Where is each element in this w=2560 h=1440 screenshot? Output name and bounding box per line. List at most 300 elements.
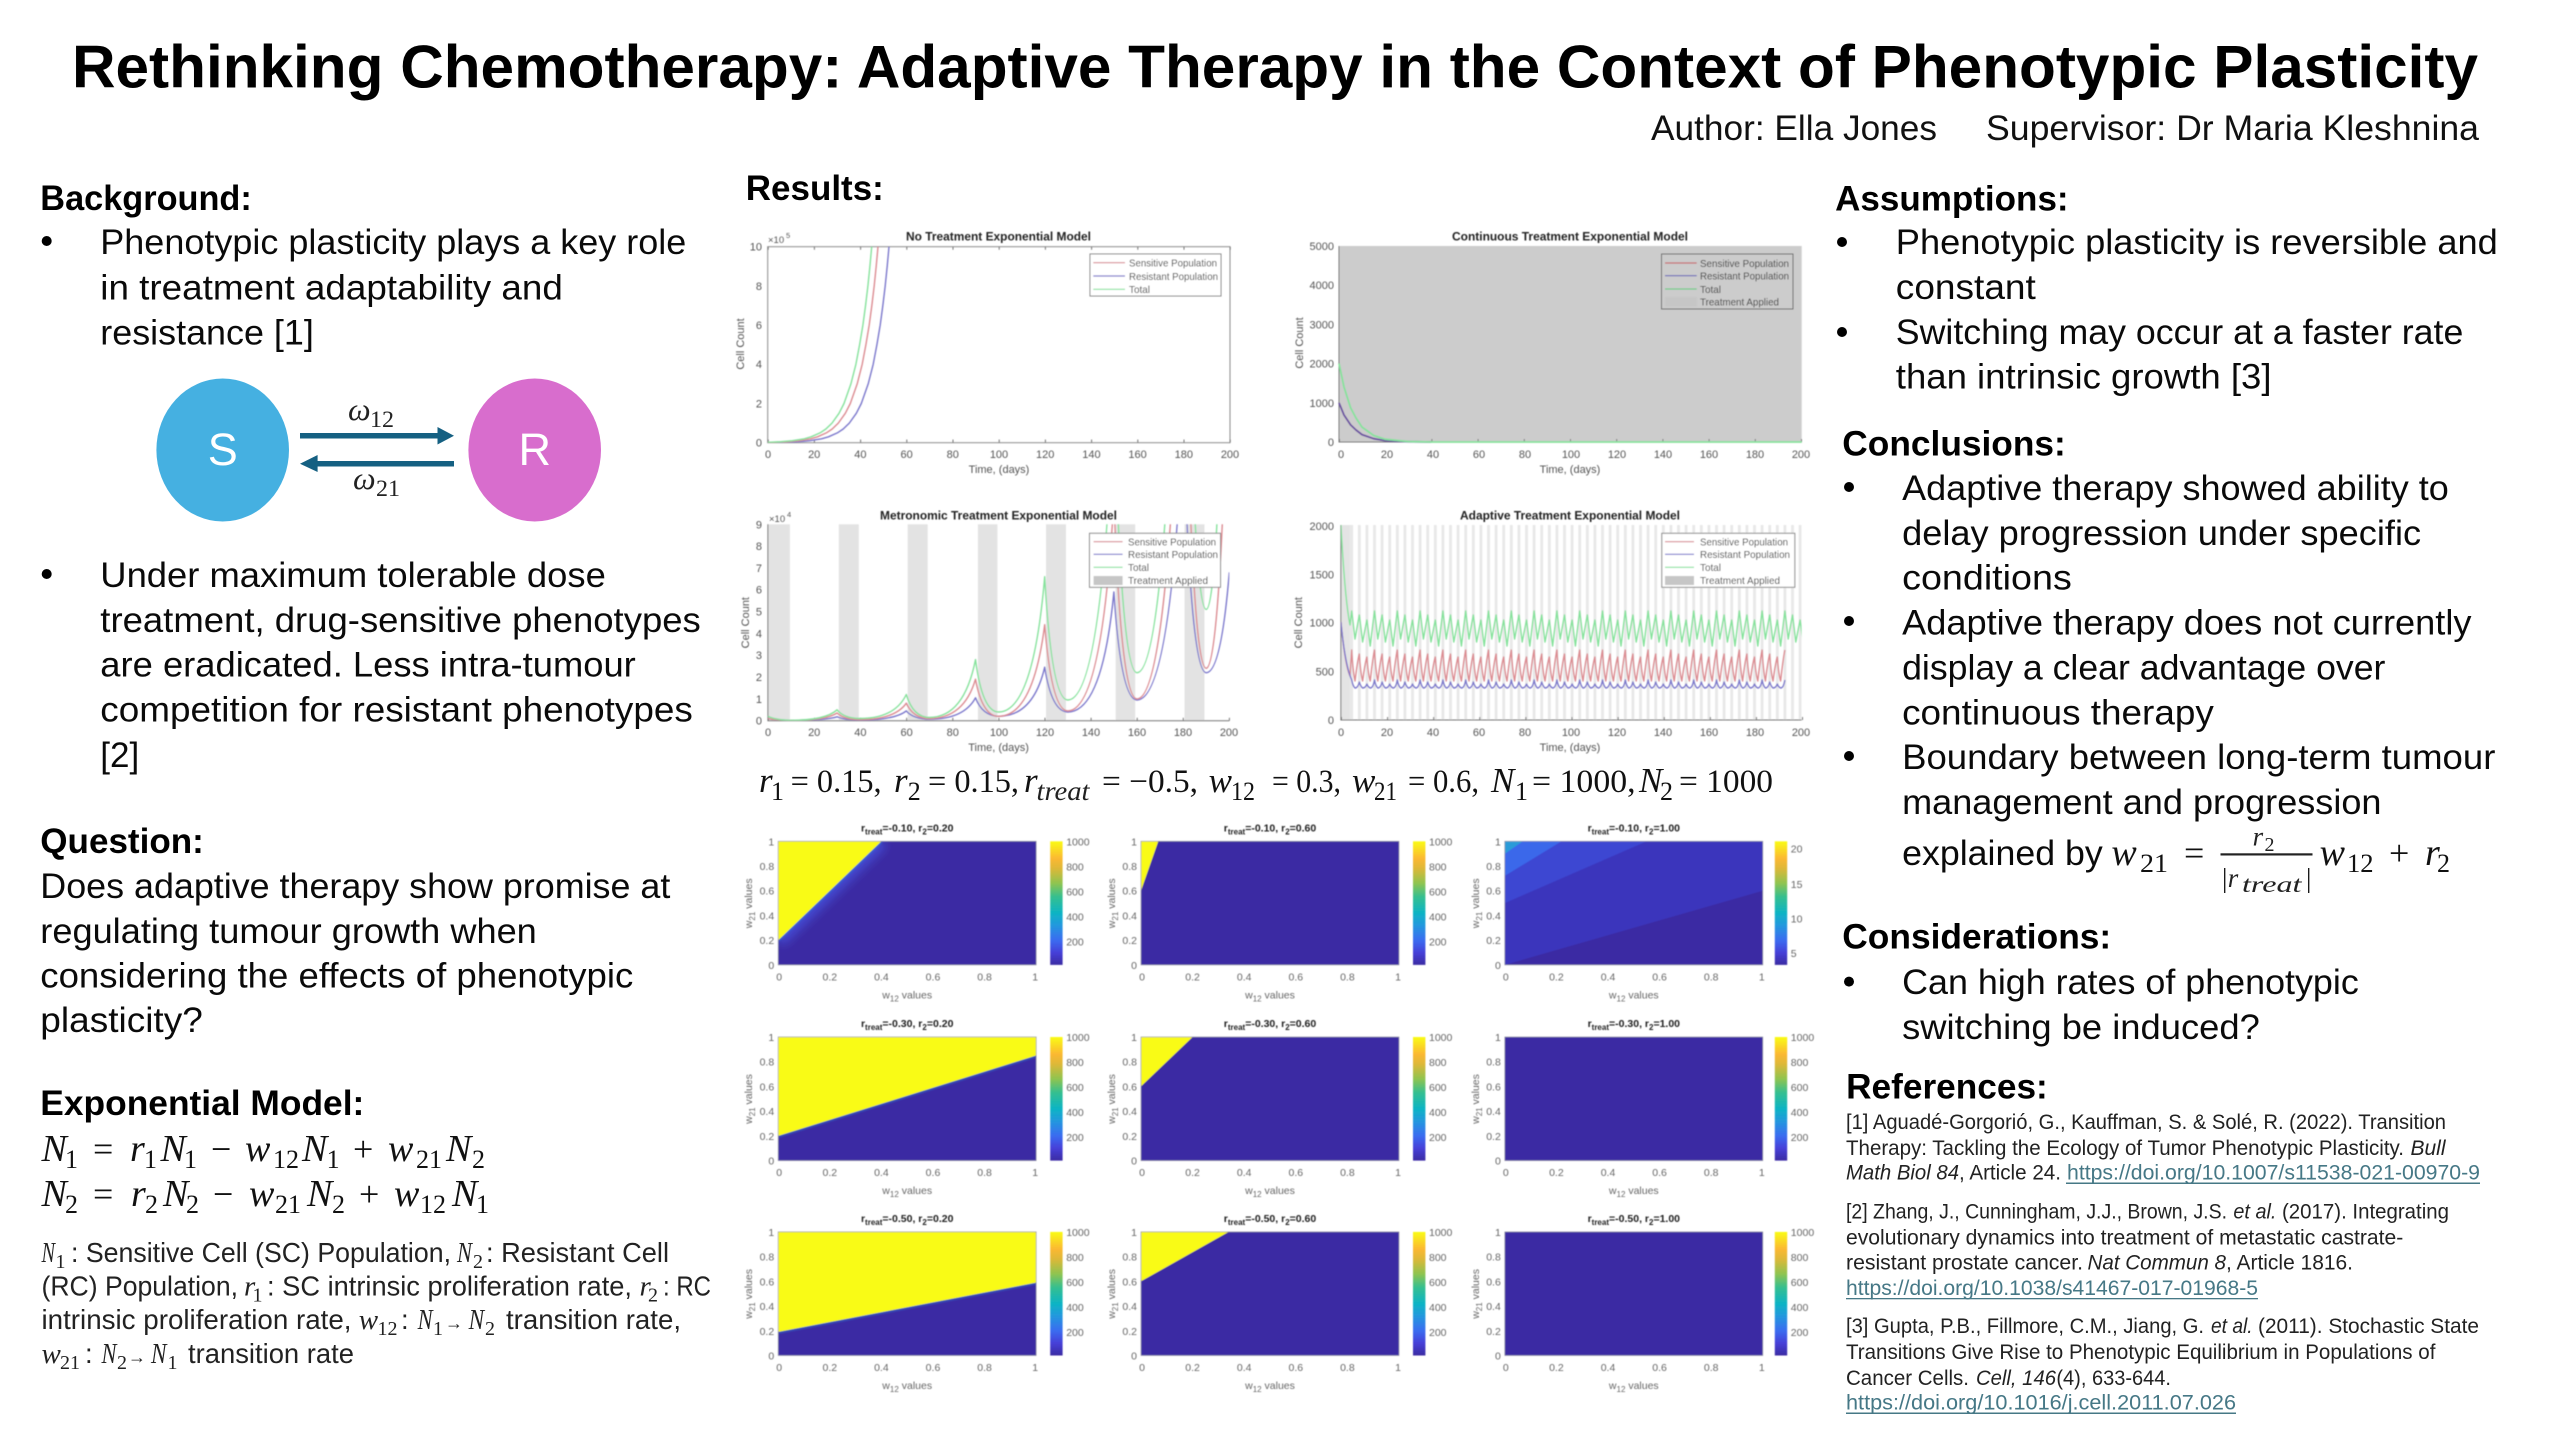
reference 2: Nat Commun 8 (2088, 1252, 2226, 1274)
chart: continuous treatment: 180 (1746, 449, 1764, 461)
heatmap: rtreat -0.10, r2 1.00: 0.2 (1549, 971, 1564, 983)
heatmap: rtreat -0.30, r2 0.20: 0 (768, 1156, 774, 1168)
parameter values: = −0.5, (1102, 764, 1198, 800)
assumptions list: Phenotypic plasticity is reversible and (1896, 223, 2498, 262)
legend (1662, 533, 1795, 587)
heatmap: rtreat -0.30, r2 1.00: 400 (1791, 1107, 1808, 1119)
equation: boundary: w (2320, 832, 2346, 874)
chart: metronomic treatment: 160 (1128, 727, 1146, 739)
heatmap: rtreat -0.30, r2 1.00: 0.4 (1486, 1106, 1501, 1118)
heatmap: rtreat -0.30, r2 1.00: 12 (1617, 1190, 1626, 1199)
heatmap: rtreat -0.50, r2 1.00: 400 (1791, 1302, 1808, 1314)
heading: considerations: Considerations: (1842, 918, 2111, 957)
heatmap: rtreat -0.30, r2 0.60: 600 (1429, 1082, 1447, 1094)
equation: N1: 1 (184, 1145, 197, 1174)
icon: resistant cell R: R (518, 424, 551, 475)
heatmap: rtreat -0.10, r2 0.60: 0.6 (1122, 886, 1137, 898)
equation: N1: N (40, 1128, 70, 1170)
conclusions list: Boundary between long-term tumour (1902, 738, 2496, 777)
reference 3: https://doi.org/10.1016/j.cell.2011.07.026 (1846, 1392, 2236, 1415)
reference 2 (1846, 1200, 2449, 1300)
chart: adaptive treatment: 180 (1746, 727, 1764, 739)
parameter values: = 0.15, (791, 764, 882, 800)
equation: boundary: r (2425, 832, 2440, 874)
equation: boundary (2111, 822, 2450, 897)
heatmap: rtreat -0.50, r2 0.60: 0.6 (1122, 1276, 1137, 1288)
chart: adaptive treatment: Time, (days) (1540, 742, 1600, 754)
equation: N2: − (213, 1174, 233, 1214)
heatmap: rtreat -0.10, r2 0.20: 400 (1066, 911, 1084, 923)
heatmap: rtreat -0.10, r2 0.20: 0.4 (760, 910, 774, 922)
heatmap: rtreat -0.10, r2 1.00: values (1470, 878, 1482, 912)
heading: exponential model: Exponential Model: (40, 1084, 364, 1123)
legend: Total (1129, 284, 1150, 296)
legend (1090, 254, 1221, 296)
legend: Total (1700, 562, 1721, 574)
heatmap: rtreat -0.10, r2 0.20: =-0.10, r (882, 822, 922, 834)
authors (1651, 109, 2480, 148)
heatmap: rtreat -0.30, r2 0.20: 600 (1066, 1082, 1084, 1094)
heatmap: rtreat -0.10, r2 0.60: 0 (1139, 971, 1145, 983)
authors: Author: Ella Jones (1651, 109, 1937, 148)
equation: N2: 12 (420, 1190, 446, 1219)
chart: continuous treatment: 60 (1473, 449, 1485, 461)
heatmap: rtreat -0.30, r2 0.20: 1000 (1066, 1032, 1090, 1044)
chart: metronomic treatment: 140 (1082, 727, 1100, 739)
legend: Sensitive Population (1128, 536, 1216, 548)
reference 1 (1846, 1111, 2480, 1185)
chart: no treatment: 140 (1082, 449, 1101, 461)
equation: N2: 2 (145, 1190, 158, 1219)
parameter values: 21 (1374, 777, 1397, 806)
heatmap: rtreat -0.30, r2 1.00: 800 (1791, 1057, 1808, 1069)
heatmap: rtreat -0.30, r2 0.60: =-0.30, r (1245, 1018, 1285, 1030)
icon: sensitive cell S: S (208, 424, 238, 475)
chart: continuous treatment: 0 (1328, 437, 1334, 449)
heatmap: rtreat -0.50, r2 1.00: values (1470, 1269, 1482, 1302)
heading: conclusions: Conclusions: (1842, 424, 2066, 463)
heatmap: rtreat -0.50, r2 0.20: values (743, 1269, 755, 1302)
heatmap: rtreat -0.10, r2 0.20: w (882, 989, 890, 1001)
chart: metronomic treatment: 2 (756, 672, 762, 684)
heatmap: rtreat -0.50, r2 1.00: 0.2 (1486, 1326, 1501, 1338)
heatmap: rtreat -0.30, r2 0.20: 2 (922, 1023, 927, 1032)
heatmap: rtreat -0.30, r2 0.60: 0.2 (1185, 1167, 1200, 1179)
chart: metronomic treatment: 20 (808, 727, 820, 739)
heatmap: rtreat -0.10, r2 0.60: 400 (1429, 911, 1447, 923)
heatmap: rtreat -0.30, r2 0.20: 0.8 (760, 1057, 774, 1069)
heatmap: rtreat -0.50, r2 0.60: 0 (1139, 1362, 1145, 1374)
heatmap: rtreat -0.50, r2 0.60 (1106, 1213, 1453, 1394)
heatmap: rtreat -0.10, r2 1.00: 20 (1791, 844, 1803, 856)
heatmap: rtreat -0.50, r2 0.20: 0.6 (760, 1276, 774, 1288)
arrow: S to R: ω (348, 391, 371, 427)
heatmap: rtreat -0.10, r2 1.00: r (1588, 822, 1592, 834)
reference 2: evolutionary dynamics into treatment of metastatic castrate- (1846, 1226, 2403, 1249)
heatmap: rtreat -0.30, r2 0.60: 0 (1139, 1167, 1145, 1179)
heatmap: rtreat -0.30, r2 0.20: 0.6 (760, 1081, 774, 1093)
heatmap: rtreat -0.30, r2 1.00: 1 (1759, 1167, 1765, 1179)
heatmap: rtreat -0.30, r2 0.60: 21 (1111, 1107, 1120, 1116)
heading: background: Background: (40, 179, 252, 218)
heatmap: rtreat -0.50, r2 0.20: w (743, 1311, 755, 1319)
heatmap: rtreat -0.10, r2 1.00: 0.4 (1486, 910, 1501, 922)
heatmap: rtreat -0.30, r2 1.00: w (1470, 1116, 1482, 1124)
heatmap: rtreat -0.30, r2 0.20: =-0.30, r (882, 1018, 922, 1030)
chart: metronomic treatment: Time, (days) (968, 742, 1029, 754)
chart: metronomic treatment: Metronomic Treatment Exponential Model (880, 510, 1117, 522)
chart: metronomic treatment: 4 (756, 628, 762, 640)
heatmap: rtreat -0.10, r2 1.00: w (1470, 921, 1482, 928)
equation: N1: w (245, 1128, 271, 1170)
heatmap: rtreat -0.30, r2 0.60: 1000 (1429, 1032, 1453, 1044)
legend: Treatment Applied (1128, 575, 1208, 587)
reference 2: , Article 1816. (2226, 1252, 2353, 1274)
heatmap: rtreat -0.10, r2 0.60: 0.4 (1122, 910, 1137, 922)
heatmap: rtreat -0.30, r2 0.60: 0 (1131, 1156, 1137, 1168)
chart: no treatment: 0 (765, 449, 771, 461)
chart: continuous treatment: 200 (1792, 449, 1810, 461)
chart: no treatment: Time, (days) (969, 464, 1029, 476)
heatmap: rtreat -0.50, r2 0.60: 0.8 (1340, 1362, 1355, 1374)
heatmap: rtreat -0.50, r2 0.60: r (1224, 1213, 1228, 1225)
parameter values (759, 761, 1773, 806)
heatmap: rtreat -0.50, r2 1.00: 0.2 (1549, 1362, 1564, 1374)
variable definitions: w (42, 1338, 62, 1370)
legend (1662, 254, 1793, 309)
heatmap: rtreat -0.30, r2 0.20: 1 (1032, 1167, 1038, 1179)
reference 3 (1846, 1315, 2479, 1415)
parameter values: = 0.15, (928, 764, 1019, 800)
heatmap: rtreat -0.10, r2 0.20: 600 (1066, 886, 1084, 898)
heatmap: rtreat -0.50, r2 0.60: 0 (1131, 1351, 1137, 1363)
legend: Sensitive Population (1129, 258, 1217, 270)
bullet text: phenotypic plasticity: resistance [1] (100, 313, 314, 352)
heatmap: rtreat -0.30, r2 0.60: 0.6 (1288, 1167, 1303, 1179)
chart: continuous treatment: 40 (1427, 449, 1439, 461)
parameter values: 2 (908, 777, 921, 806)
heatmap: rtreat -0.30, r2 0.20: 0.2 (760, 1131, 774, 1143)
reference 3: (2011). Stochastic State (2258, 1315, 2479, 1338)
variable definitions: 12 (378, 1318, 398, 1340)
heatmap: rtreat -0.50, r2 1.00: values (1625, 1380, 1659, 1392)
equation: boundary: r (2228, 863, 2239, 893)
chart: continuous treatment: 2000 (1310, 359, 1334, 371)
heatmap: rtreat -0.50, r2 0.20: w (882, 1380, 890, 1392)
heatmap: rtreat -0.10, r2 0.60: 800 (1429, 861, 1447, 873)
equation: N2: w (394, 1173, 420, 1215)
heatmap: rtreat -0.10, r2 1.00: 0.2 (1486, 935, 1501, 947)
heatmap: rtreat -0.50, r2 0.60: w (1106, 1311, 1118, 1319)
chart: continuous treatment: 20 (1381, 449, 1393, 461)
heatmap: rtreat -0.10, r2 0.60: 0.8 (1122, 861, 1137, 873)
chart: adaptive treatment: Cell Count (1293, 597, 1305, 648)
chart: adaptive treatment: 500 (1316, 667, 1334, 679)
chart: adaptive treatment: 120 (1608, 727, 1626, 739)
variable definitions: w (359, 1304, 379, 1336)
heatmap: rtreat -0.10, r2 0.60: 0.2 (1122, 935, 1137, 947)
title: Rethinking Chemotherapy: Adaptive Therapy in the Context of Phenotypic Plasticity (72, 34, 2479, 100)
arrow: R to S (300, 455, 454, 501)
equation: boundary: 12 (2347, 849, 2374, 878)
heatmap: rtreat -0.50, r2 1.00: 0.4 (1486, 1301, 1501, 1313)
equation: N2: 1 (476, 1190, 489, 1219)
heatmap: rtreat -0.50, r2 0.60: 600 (1429, 1277, 1447, 1289)
reference 2: (2017). Integrating (2282, 1200, 2449, 1224)
equation: N1: − (211, 1129, 231, 1169)
chart: metronomic treatment: 9 (756, 519, 762, 531)
considerations list: Can high rates of phenotypic (1902, 963, 2359, 1002)
variable definitions (41, 1237, 711, 1374)
variable definitions: 1 (433, 1318, 443, 1340)
heatmap: rtreat -0.50, r2 1.00: 200 (1791, 1327, 1808, 1339)
heatmap: rtreat -0.50, r2 0.60: 0.8 (1122, 1252, 1137, 1264)
chart: metronomic treatment: ×10 (769, 514, 785, 525)
equation: N1: 1 (327, 1145, 340, 1174)
heatmap: rtreat -0.50, r2 0.60: =0.60 (1290, 1213, 1316, 1225)
parameter values: 12 (1231, 777, 1255, 806)
heatmap: rtreat -0.10, r2 0.20: 0 (776, 971, 782, 983)
heatmap: rtreat -0.30, r2 0.60: 200 (1429, 1132, 1447, 1144)
chart: adaptive treatment: 0 (1328, 715, 1334, 727)
equation: N1: r (130, 1128, 145, 1170)
heatmap: rtreat -0.10, r2 0.20: 1 (1032, 971, 1038, 983)
conclusions list: management and progression (1902, 783, 2382, 822)
heatmap: rtreat -0.10, r2 1.00: 0.8 (1486, 861, 1501, 873)
variable definitions: (RC) Population, (42, 1270, 238, 1302)
bullet text: maximum tolerable dose: treatment, drug-sensitive phenotypes (100, 601, 701, 640)
variable definitions: N (101, 1338, 118, 1370)
equation: N2: r (131, 1173, 146, 1215)
heatmap: rtreat -0.50, r2 1.00: 2 (1649, 1218, 1654, 1227)
heading: question: Question: (40, 822, 204, 861)
considerations list (1844, 963, 2359, 1047)
heatmap: rtreat -0.10, r2 0.60: 1 (1395, 971, 1401, 983)
heatmap: rtreat -0.50, r2 1.00: =1.00 (1653, 1213, 1680, 1225)
heatmap: rtreat -0.10, r2 0.20: 0 (768, 960, 774, 972)
conclusions list: continuous therapy (1902, 693, 2214, 732)
chart: continuous treatment: 4000 (1310, 280, 1334, 292)
equation: N2: N (162, 1173, 191, 1215)
heatmap: rtreat -0.30, r2 1.00: 0 (1495, 1156, 1501, 1168)
heatmap: rtreat -0.10, r2 0.60: 0.4 (1237, 971, 1252, 983)
heatmap: rtreat -0.50, r2 0.20: 400 (1066, 1302, 1084, 1314)
equation: N2: 2 (65, 1190, 78, 1219)
chart: continuous treatment: 5000 (1310, 241, 1334, 253)
heatmap: rtreat -0.10, r2 0.60: treat (1228, 827, 1246, 836)
equation: N2 (40, 1173, 489, 1219)
chart: adaptive treatment: 200 (1792, 727, 1810, 739)
chart: metronomic treatment: 1 (756, 694, 762, 706)
heatmap: rtreat -0.30, r2 0.20: values (743, 1074, 755, 1107)
heatmap: rtreat -0.10, r2 0.20: w (743, 921, 755, 928)
chart: no treatment: Cell Count (735, 318, 747, 370)
variable definitions: transition rate, (506, 1304, 681, 1335)
bullet text: phenotypic plasticity (42, 223, 686, 352)
variable definitions: N (41, 1237, 56, 1269)
heatmap: rtreat -0.10, r2 0.20: values (743, 878, 755, 912)
reference 2: et al. (2233, 1200, 2276, 1224)
heatmap: rtreat -0.10, r2 1.00: 10 (1791, 913, 1803, 925)
bullet text: phenotypic plasticity: in treatment adaptability and (100, 268, 563, 307)
heatmap: rtreat -0.30, r2 0.20: 800 (1066, 1057, 1084, 1069)
heatmap: rtreat -0.50, r2 0.20: 0.4 (874, 1362, 889, 1374)
variable definitions: r (244, 1270, 256, 1302)
equation: N1 (40, 1128, 485, 1174)
parameter values: = 0.3, (1272, 764, 1341, 800)
chart: no treatment: 0 (756, 438, 762, 450)
heatmap: rtreat -0.10, r2 0.20: treat (865, 827, 883, 836)
heatmap: rtreat -0.50, r2 0.60: 0.6 (1288, 1362, 1303, 1374)
heatmap: rtreat -0.10, r2 0.60: =-0.10, r (1245, 822, 1285, 834)
heatmap: rtreat -0.30, r2 1.00: 200 (1791, 1132, 1808, 1144)
conclusions list: display a clear advantage over (1902, 648, 2386, 687)
parameter values: w (1352, 761, 1376, 800)
panel: background (40, 179, 701, 775)
parameter values: r (759, 761, 773, 800)
heatmap: rtreat -0.50, r2 0.60: 400 (1429, 1302, 1447, 1314)
heatmap: rtreat -0.50, r2 0.20: 0.8 (760, 1252, 774, 1264)
heatmap: rtreat -0.50, r2 0.20: 1 (1032, 1362, 1038, 1374)
heatmap: rtreat -0.10, r2 0.20: 2 (922, 827, 927, 836)
chart: continuous treatment: 80 (1519, 449, 1531, 461)
heatmap: rtreat -0.30, r2 1.00: 21 (1475, 1107, 1484, 1116)
heatmap: rtreat -0.50, r2 0.60: 0.4 (1122, 1301, 1137, 1313)
variable definitions: : Resistant Cell (486, 1237, 669, 1268)
heatmap: rtreat -0.30, r2 1.00: values (1625, 1185, 1659, 1197)
chart: continuous treatment: 3000 (1310, 319, 1334, 331)
chart: no treatment: 4 (756, 359, 762, 371)
heatmap: rtreat -0.50, r2 1.00: 800 (1791, 1252, 1808, 1264)
heatmap: rtreat -0.50, r2 1.00: 0.6 (1486, 1276, 1501, 1288)
heatmap: rtreat -0.30, r2 0.20: 0.2 (822, 1167, 837, 1179)
heatmap: rtreat -0.10, r2 0.20: r (861, 822, 865, 834)
heatmap: rtreat -0.30, r2 0.60: 800 (1429, 1057, 1447, 1069)
heatmap: rtreat -0.50, r2 0.60: 0.4 (1237, 1362, 1252, 1374)
heatmap: rtreat -0.10, r2 1.00: 1 (1495, 836, 1501, 848)
panel: conclusions (1842, 424, 2496, 897)
heatmap: rtreat -0.50, r2 1.00: 0 (1503, 1362, 1509, 1374)
heatmap: rtreat -0.50, r2 1.00: w (1609, 1380, 1617, 1392)
parameter values: r (1024, 761, 1038, 800)
equation: N1: = (93, 1129, 113, 1169)
heatmap: rtreat -0.30, r2 1.00: 0.8 (1486, 1057, 1501, 1069)
chart: no treatment: 5 (786, 231, 790, 240)
heatmap: rtreat -0.30, r2 0.20: treat (865, 1023, 883, 1032)
heatmap: rtreat -0.30, r2 0.20: w (743, 1116, 755, 1124)
heatmap: rtreat -0.30, r2 1.00: 1000 (1791, 1032, 1814, 1044)
heatmap: rtreat -0.50, r2 1.00: 0.8 (1704, 1362, 1719, 1374)
heatmap: rtreat -0.10, r2 1.00: 12 (1617, 994, 1626, 1003)
heatmap: rtreat -0.50, r2 1.00: r (1588, 1213, 1592, 1225)
heatmap: rtreat -0.50, r2 0.20: 21 (748, 1302, 757, 1311)
heatmap: rtreat -0.10, r2 0.60 (1106, 822, 1453, 1003)
chart: metronomic treatment: 40 (854, 727, 867, 739)
heatmap: rtreat -0.10, r2 0.60: w (1245, 989, 1253, 1001)
heatmap: rtreat -0.30, r2 0.60: 0.8 (1122, 1057, 1137, 1069)
heatmap: rtreat -0.50, r2 1.00: 600 (1791, 1277, 1808, 1289)
heatmap: rtreat -0.30, r2 0.60: w (1245, 1185, 1253, 1197)
variable definitions: : (85, 1338, 93, 1369)
chart: no treatment (735, 231, 1239, 476)
panel: references (1846, 1067, 2480, 1415)
chart: metronomic treatment: 6 (756, 585, 762, 597)
heatmap: rtreat -0.10, r2 1.00: w (1609, 989, 1617, 1001)
legend: Total (1128, 562, 1149, 574)
heatmap: rtreat -0.30, r2 0.20: 12 (890, 1190, 899, 1199)
heatmap: rtreat -0.30, r2 0.20: 200 (1066, 1132, 1084, 1144)
heatmap: rtreat -0.30, r2 0.60: 1 (1131, 1032, 1137, 1044)
equation: boundary: | (2222, 863, 2227, 893)
heatmap: rtreat -0.30, r2 0.20: values (899, 1185, 932, 1197)
legend: Total (1700, 284, 1721, 296)
reference 1: , Article 24. (1959, 1162, 2061, 1185)
heatmap: rtreat -0.10, r2 0.60: =0.60 (1290, 822, 1316, 834)
equation: N1: N (445, 1128, 474, 1170)
conclusions list: explained by (1902, 834, 2103, 873)
chart: no treatment: 100 (990, 449, 1008, 461)
equation: N2: N (40, 1173, 70, 1215)
legend: Sensitive Population (1700, 536, 1788, 548)
heatmap: rtreat -0.30, r2 1.00: =1.00 (1653, 1018, 1680, 1030)
heatmap: rtreat -0.50, r2 1.00 (1470, 1213, 1814, 1394)
chart: metronomic treatment: 60 (900, 727, 913, 739)
heatmap: rtreat -0.10, r2 0.60: 0.6 (1288, 971, 1303, 983)
heatmap: rtreat -0.10, r2 0.20: 1 (768, 836, 774, 848)
heatmap: rtreat -0.50, r2 0.20: 0.4 (760, 1301, 774, 1313)
heatmap: rtreat -0.30, r2 0.20: 0.4 (760, 1106, 774, 1118)
reference 1: Therapy: Tackling the Ecology of Tumor Phenotypic Plasticity. (1846, 1137, 2404, 1160)
bullet text: maximum tolerable dose: competition for resistant phenotypes (100, 690, 693, 730)
chart: adaptive treatment: 160 (1700, 727, 1718, 739)
reference 1: Bull (2410, 1137, 2447, 1160)
assumptions list: Switching may occur at a faster rate (1896, 313, 2463, 352)
heatmap: rtreat -0.30, r2 0.20: 1 (768, 1032, 774, 1044)
heatmap: rtreat -0.10, r2 1.00: 1 (1759, 971, 1765, 983)
heatmap: rtreat -0.30, r2 0.60: 2 (1285, 1023, 1290, 1032)
heatmap: rtreat -0.50, r2 0.60: 1 (1131, 1227, 1137, 1239)
heatmap: rtreat -0.30, r2 0.20: r (861, 1018, 865, 1030)
heatmap: rtreat -0.30, r2 0.60: =0.60 (1290, 1018, 1316, 1030)
heatmap: rtreat -0.50, r2 1.00: 21 (1475, 1302, 1484, 1311)
heading: results: Results: (746, 169, 884, 208)
equation: boundary: r (2253, 822, 2264, 852)
heatmap: rtreat -0.10, r2 0.20: 0.6 (926, 971, 940, 983)
variable definitions: → (445, 1313, 463, 1333)
reference 1: https://doi.org/10.1007/s11538-021-00970-9 (2067, 1162, 2480, 1185)
chart: metronomic treatment: 7 (756, 563, 762, 575)
arrow: S to R (300, 391, 454, 444)
chart: no treatment: 120 (1036, 449, 1054, 461)
heatmap: rtreat -0.50, r2 1.00: 1 (1759, 1362, 1765, 1374)
equation: N1: N (160, 1128, 188, 1170)
chart: metronomic treatment: 0 (756, 716, 762, 728)
heatmap: rtreat -0.10, r2 1.00: values (1625, 989, 1659, 1001)
chart: no treatment: 40 (854, 449, 867, 461)
heatmap: rtreat -0.10, r2 0.20: 0.2 (822, 971, 837, 983)
chart: metronomic treatment: Cell Count (740, 597, 752, 648)
heatmap: rtreat -0.50, r2 0.20: 800 (1066, 1252, 1084, 1264)
heatmap: rtreat -0.50, r2 1.00: w (1470, 1311, 1482, 1319)
heatmap: rtreat -0.10, r2 0.60: 200 (1429, 936, 1447, 948)
chart: no treatment: 60 (900, 449, 913, 461)
conclusions list: Adaptive therapy does not currently (1902, 604, 2472, 643)
chart: metronomic treatment: 5 (756, 606, 762, 618)
heatmap: rtreat -0.50, r2 0.20: 0.6 (926, 1362, 940, 1374)
equation: N1: 12 (273, 1145, 299, 1174)
heatmap: rtreat -0.10, r2 0.60: values (1262, 989, 1295, 1001)
heatmap: rtreat -0.30, r2 1.00: w (1609, 1185, 1617, 1197)
